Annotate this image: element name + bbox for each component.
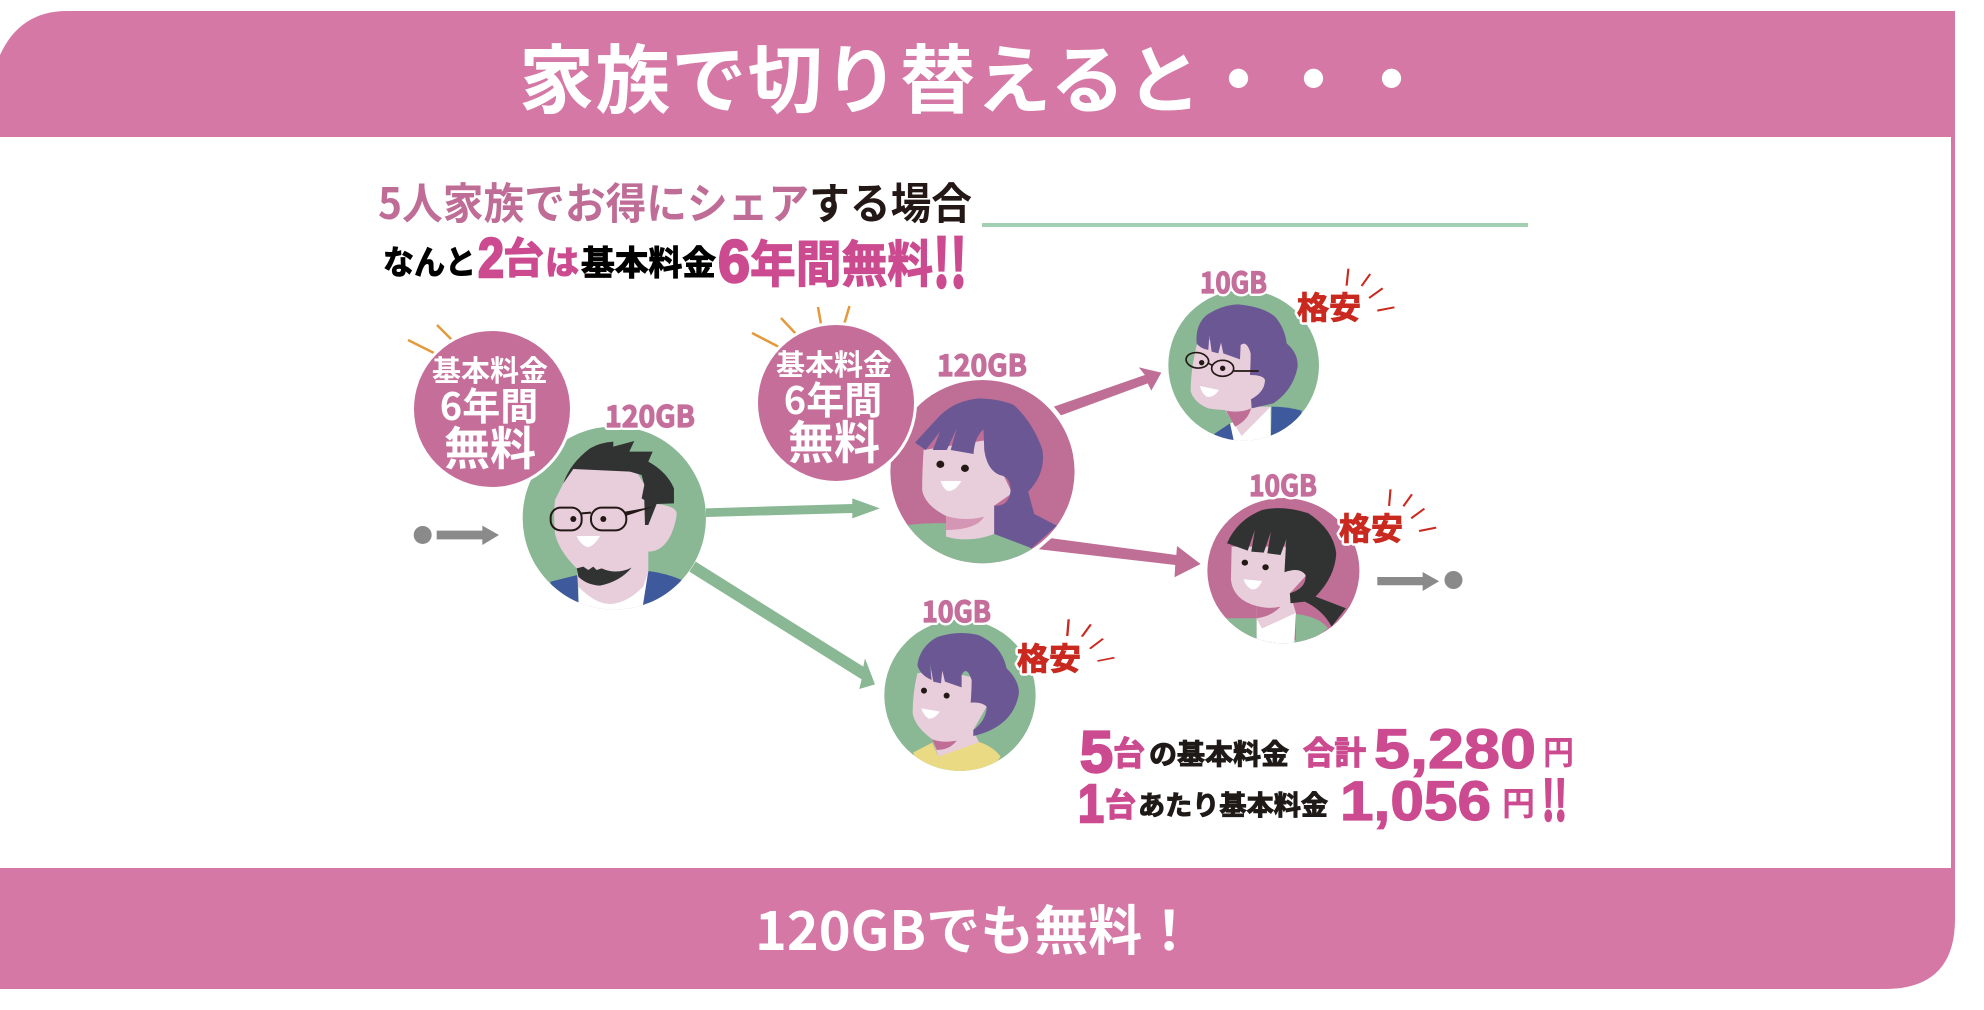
subheading line 2: は bbox=[545, 236, 579, 284]
label: 10GB lower: 10GB bbox=[922, 589, 991, 631]
label: cheap right: 格安 bbox=[1339, 504, 1403, 549]
badge: right 6 years free: 基本料金 bbox=[776, 342, 892, 384]
arrow: pink to upper right person bbox=[1054, 367, 1161, 415]
person: top right child with glasses bbox=[1167, 288, 1323, 447]
line: per device: 円 bbox=[1502, 777, 1535, 825]
label: 120GB father: 120GB bbox=[605, 392, 695, 436]
person: lower child bbox=[884, 620, 1036, 771]
subheading line 2: 台 bbox=[503, 225, 544, 286]
page frame right border bbox=[1951, 100, 1955, 900]
line: total: 5 bbox=[1080, 720, 1113, 785]
label: 10GB right: 10GB bbox=[1249, 463, 1317, 505]
label: cheap lower: 格安 bbox=[1017, 634, 1081, 679]
rays: red lower bbox=[1067, 619, 1114, 661]
header band bbox=[0, 11, 1955, 137]
badge: left 6 years free: 6年間 bbox=[440, 376, 538, 431]
badge: right 6 years free: 無料 bbox=[788, 407, 880, 473]
line: total bbox=[1080, 717, 1574, 785]
badge: left 6 years free: 基本料金 bbox=[432, 348, 548, 390]
subheading line 2: !! bbox=[933, 211, 967, 307]
subheading line 2 bbox=[383, 211, 967, 307]
line: total: の基本料金 bbox=[1149, 733, 1289, 773]
label: cheap top right: 格安 bbox=[1297, 283, 1361, 328]
label: cheap top right bbox=[1297, 269, 1394, 328]
title: ・・・ bbox=[1201, 20, 1429, 129]
rays: orange right bubble bbox=[752, 306, 850, 347]
label: 120GB mother: 120GB bbox=[937, 341, 1027, 385]
green rule bbox=[982, 223, 1528, 227]
subheading line 2: 2 bbox=[478, 226, 504, 289]
arrow: pink to right person bbox=[1039, 538, 1201, 577]
line: per device: 台 bbox=[1105, 780, 1136, 826]
person: father portrait bbox=[520, 423, 710, 613]
rays: red top right bbox=[1347, 269, 1394, 311]
label: cheap lower: 格安 bbox=[1017, 634, 1081, 679]
footer band bbox=[0, 868, 1955, 989]
arrow: green to lower person bbox=[689, 562, 875, 689]
person: right child with black hair bbox=[1207, 498, 1360, 644]
badge: left 6 years free bbox=[412, 330, 572, 488]
label: 10GB right: 10GB bbox=[1249, 463, 1317, 505]
label: 10GB lower: 10GB bbox=[922, 589, 991, 631]
line: per device: 1 bbox=[1078, 774, 1104, 834]
subheading line 1: 5人家族でお得にシェアする場合 bbox=[378, 170, 972, 232]
title: 家族で切り替えると bbox=[519, 20, 1203, 129]
label: 120GB father: 120GB bbox=[605, 392, 695, 436]
line: total: 台 bbox=[1113, 727, 1145, 775]
label: 10GB top right: 10GB bbox=[1200, 260, 1267, 302]
line: per device: 1,056 bbox=[1340, 769, 1491, 832]
subheading line 2: なんと bbox=[383, 236, 476, 284]
label: cheap top right: 格安 bbox=[1297, 283, 1361, 328]
line: total: 円 bbox=[1543, 726, 1574, 774]
footer text: 120GBでも無料！ bbox=[755, 887, 1196, 966]
line: total: 5,280 bbox=[1374, 717, 1536, 780]
badge: right 6 years free bbox=[756, 324, 916, 482]
label: cheap right bbox=[1339, 489, 1436, 549]
label: 120GB mother: 120GB bbox=[937, 341, 1027, 385]
label: cheap right: 格安 bbox=[1339, 504, 1403, 549]
rays: orange left bubble bbox=[408, 325, 452, 353]
arrow: gray start bbox=[414, 526, 499, 545]
subheading line 2: 6 bbox=[718, 228, 750, 295]
rays: red right bbox=[1389, 489, 1436, 531]
label: cheap lower bbox=[1017, 619, 1114, 679]
subheading line 2: 年間無料 bbox=[750, 225, 933, 297]
subheading line 2: 基本料金 bbox=[581, 236, 716, 285]
price summary bbox=[1078, 717, 1574, 836]
line: per device: !! bbox=[1542, 757, 1567, 836]
label: 10GB top right: 10GB bbox=[1200, 260, 1267, 302]
person: mother portrait bbox=[887, 377, 1080, 568]
badge: left 6 years free: 無料 bbox=[444, 413, 536, 479]
line: per device: あたり基本料金 bbox=[1138, 784, 1328, 823]
badge: right 6 years free: 6年間 bbox=[784, 370, 882, 425]
arrow: gray end bbox=[1377, 571, 1462, 591]
line: per device bbox=[1078, 757, 1567, 836]
arrow: green to mother bbox=[706, 498, 880, 518]
line: total: 合計 bbox=[1303, 728, 1366, 774]
